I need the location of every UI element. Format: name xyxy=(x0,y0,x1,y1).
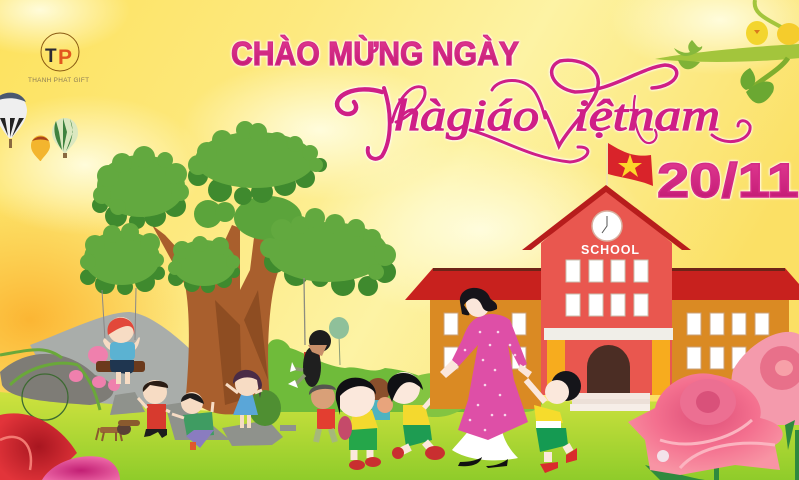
bushes behind xyxy=(268,339,543,417)
boy in green jumping xyxy=(172,392,214,450)
canopy: top xyxy=(188,121,327,205)
shoes xyxy=(458,457,482,466)
dog xyxy=(96,420,140,441)
vine with flowers xyxy=(0,346,120,420)
chick xyxy=(777,23,799,45)
rock group xyxy=(110,392,296,446)
boy holding teacher's hand xyxy=(526,371,581,473)
canopy: right xyxy=(260,208,396,296)
vietnamese flag xyxy=(607,143,653,186)
canopy: left top xyxy=(92,146,189,229)
rose: upper right pink xyxy=(731,332,799,425)
group of children behind xyxy=(366,378,393,420)
balloon: orange xyxy=(31,136,50,161)
school sign: SCHOOL xyxy=(581,243,639,257)
rose stems and leaves xyxy=(645,420,799,480)
rose: red xyxy=(0,413,77,480)
logo: Thanh Phat Gift xyxy=(28,33,89,84)
script flourishes xyxy=(337,60,750,162)
branch with chicks xyxy=(655,0,799,103)
rose: magenta xyxy=(42,456,120,480)
right wing xyxy=(672,268,799,399)
title: Chào mừng ngày: CHÀO MỪNG NGÀY xyxy=(231,35,519,72)
child on swing xyxy=(96,288,145,384)
date: 20/11: 20/11 xyxy=(657,155,799,208)
canopy: left lower xyxy=(80,223,165,295)
teacher in ao dai xyxy=(440,288,532,468)
rose: large pink xyxy=(628,373,783,475)
left wing xyxy=(405,268,541,409)
logo: Thanh Phat Gift: P xyxy=(58,46,72,69)
dress dots xyxy=(464,331,516,431)
tree trunks xyxy=(152,205,278,414)
bush beside rocks xyxy=(249,390,281,426)
small boy in red shirt xyxy=(309,385,336,442)
balloon: striped black and white xyxy=(0,93,27,148)
hot air balloons xyxy=(0,93,78,161)
face and hair xyxy=(466,291,490,317)
title: Nhà giáo Việt Nam script: hàgiáo xyxy=(394,91,539,140)
boy on tyre swing xyxy=(288,278,331,388)
balloon: teal toy xyxy=(329,317,349,365)
title: Nhà giáo Việt Nam script: iệtnam xyxy=(574,91,720,140)
title: Nhà giáo Việt Nam script xyxy=(337,60,750,162)
clock xyxy=(592,211,622,241)
central block xyxy=(522,185,691,411)
tree xyxy=(80,121,396,414)
logo: Thanh Phat Gift: THANH PHAT GIFT xyxy=(28,77,89,84)
school building xyxy=(405,185,799,411)
boy in red with dog xyxy=(138,380,170,438)
girl in blue dress xyxy=(226,370,262,428)
branch and leaves xyxy=(655,0,799,103)
hill xyxy=(0,312,191,410)
logo: Thanh Phat Gift: T xyxy=(45,46,57,67)
dress xyxy=(452,314,528,440)
balloon: green striped xyxy=(52,118,78,158)
ground xyxy=(0,392,799,480)
trousers xyxy=(452,395,518,460)
canopy: small behind xyxy=(194,196,302,240)
girl with backpack xyxy=(336,378,381,470)
hands xyxy=(440,360,459,378)
chick xyxy=(746,21,768,45)
boy in yellow with backpack xyxy=(387,372,445,460)
canopy: middle xyxy=(168,236,240,293)
